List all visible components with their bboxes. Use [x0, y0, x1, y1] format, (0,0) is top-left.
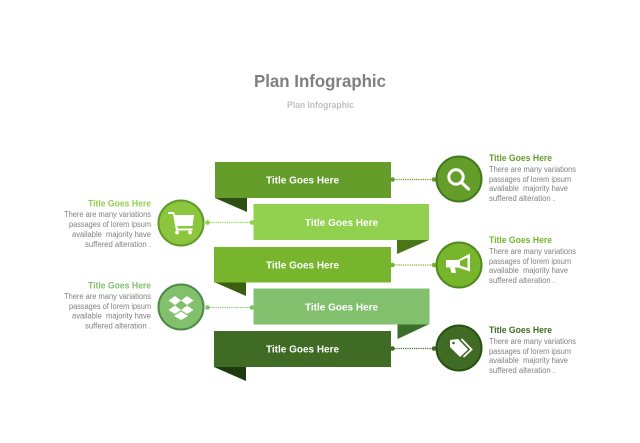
icon: shopping cart — [158, 200, 204, 246]
text block: upper left: suffered alteration . — [85, 240, 151, 249]
text block: bottom right: Title Goes Here — [489, 325, 552, 336]
text block: lower left: suffered alteration . — [85, 322, 151, 330]
text block: middle right: available majority have — [489, 266, 569, 275]
text block: bottom right: available majority have — [489, 356, 569, 365]
text block: bottom right — [489, 325, 576, 375]
ribbon 5: Title Goes Here — [266, 344, 339, 356]
ribbon 3: Title Goes Here — [266, 260, 339, 272]
text block: middle right: There are many variations — [489, 247, 576, 256]
text block: lower left: available majority have — [72, 312, 152, 320]
text block: upper left: available majority have — [72, 230, 152, 239]
text block: lower left: Title Goes Here — [88, 280, 151, 292]
text block: lower left: passages of lorem ipsum — [69, 302, 151, 311]
connector 1 — [390, 177, 436, 182]
text block: middle right: Title Goes Here — [489, 235, 552, 246]
text block: top right: available majority have — [489, 184, 569, 193]
title: Plan Infographic — [254, 71, 386, 91]
icon: tags — [436, 326, 482, 370]
text block: middle right: suffered alteration . — [489, 276, 555, 285]
ribbon 2 — [254, 204, 429, 254]
text block: top right: There are many variations — [489, 165, 576, 174]
ribbon 4: Title Goes Here — [305, 302, 378, 314]
icon: magnifier — [436, 156, 482, 202]
text block: upper left — [64, 198, 152, 249]
text block: bottom right: passages of lorem ipsum — [489, 347, 571, 356]
connector 5 — [205, 305, 254, 310]
text block: bottom right: There are many variations — [489, 337, 576, 346]
connector 4 — [205, 220, 254, 225]
text block: lower left — [64, 280, 152, 330]
connector 3 — [390, 346, 436, 351]
text block: top right: passages of lorem ipsum — [489, 175, 571, 184]
text block: lower left: There are many variations — [64, 292, 151, 301]
text block: top right — [489, 153, 576, 203]
text block: upper left: passages of lorem ipsum — [69, 220, 151, 229]
subtitle: Plan Infographic — [287, 100, 354, 111]
ribbon 2: Title Goes Here — [305, 217, 378, 229]
icon: megaphone — [436, 242, 482, 288]
ribbon 1 — [215, 162, 391, 212]
ribbon 4 — [254, 288, 430, 339]
ribbon 3 — [214, 247, 391, 296]
ribbon 1: Title Goes Here — [266, 174, 339, 186]
connector 2 — [390, 263, 436, 267]
text block: bottom right: suffered alteration . — [489, 366, 555, 375]
text block: top right: suffered alteration . — [489, 194, 555, 203]
text block: top right: Title Goes Here — [489, 153, 552, 164]
text block: middle right — [489, 235, 576, 285]
text block: upper left: There are many variations — [64, 210, 151, 219]
text block: upper left: Title Goes Here — [88, 198, 151, 210]
ribbon 5 — [214, 331, 391, 381]
text block: middle right: passages of lorem ipsum — [489, 257, 571, 266]
icon: dropbox — [158, 284, 204, 330]
